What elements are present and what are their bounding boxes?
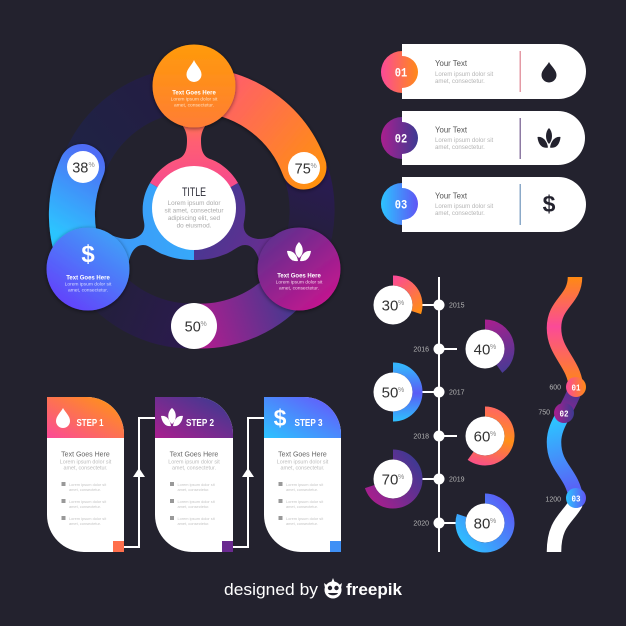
step 1 card: Lorem ipsum dolor sit (60, 460, 112, 466)
card 02: Lorem ipsum dolor sit (435, 137, 494, 144)
gauge: 70% (370, 454, 417, 504)
step 1 card: STEP 1 (76, 417, 104, 429)
badge: 38%: % (88, 162, 95, 169)
badge: 50%: 50 (185, 320, 201, 336)
badge: 75% (288, 152, 320, 184)
step 3 card: amet, consectetur. (286, 504, 318, 509)
card 03: 03 (395, 198, 407, 212)
center title circle: Lorem ipsum dolor (168, 200, 221, 207)
step 1 card: Lorem ipsum dolor sit (69, 482, 107, 487)
card 03: $ (543, 191, 556, 217)
center title circle (152, 166, 236, 250)
step 1 card: Text Goes Here (61, 452, 110, 458)
step 3 card: Lorem ipsum dolor sit (286, 499, 324, 504)
blue path segment (554, 413, 576, 498)
orange path segment (554, 277, 576, 387)
gauge: 40%: % (490, 344, 496, 351)
connector: right neck (194, 183, 284, 270)
node: right purple: Text Goes Here (277, 274, 321, 280)
year labels: 2016 (413, 346, 429, 354)
step 2 card: Lorem ipsum dolor sit (178, 516, 216, 521)
step 3 card: Lorem ipsum dolor sit (286, 482, 324, 487)
card 03: Your Text (435, 192, 468, 200)
step 2 card: amet, consectetur. (178, 504, 209, 509)
step 1 card (47, 397, 124, 552)
badge: 50% (171, 303, 217, 349)
value labels: 1200 (545, 496, 561, 504)
step 2 card: amet, consectetur. (178, 487, 209, 492)
gauge: 40% (466, 324, 509, 369)
node: left blue: amet, consectetur. (68, 288, 108, 294)
card 03 (381, 177, 586, 232)
node: left blue: Lorem ipsum dolor sit (65, 282, 112, 288)
connector: left neck (104, 183, 194, 270)
marker 02: 02 (560, 410, 568, 420)
step 2 card: Lorem ipsum dolor sit (178, 482, 216, 487)
gauge: 80% (460, 498, 509, 548)
step 1 card: amet, consectetur. (69, 504, 101, 509)
panel: step flow (47, 397, 341, 552)
step 2 card: STEP 2 (186, 417, 214, 429)
panel: winding path chart (538, 277, 586, 552)
node: left blue (46, 228, 130, 310)
year labels: 2018 (413, 434, 429, 440)
card 01: Your Text (435, 59, 468, 68)
marker 01: 01 (572, 384, 581, 394)
node: top orange (152, 44, 236, 128)
step 3 card: amet, consectetur. (286, 487, 318, 492)
step 1 card: amet, consectetur. (69, 487, 101, 492)
blue arc (72, 167, 82, 255)
badge: 38%: 38 (72, 160, 88, 176)
year labels: 2017 (449, 390, 465, 396)
gauge: 50%: 50 (382, 384, 398, 402)
badge: 75%: % (310, 163, 317, 170)
gauge: 60% (466, 411, 510, 461)
gauge: 80%: 80 (474, 516, 490, 532)
card 03: Lorem ipsum dolor sit (435, 203, 494, 210)
value labels: 600 (549, 384, 561, 392)
marker 03 (566, 488, 586, 508)
step 1 card: Lorem ipsum dolor sit (69, 499, 107, 504)
node: right purple (258, 228, 340, 310)
value labels (538, 384, 561, 504)
gauge: 80%: % (490, 518, 496, 525)
year labels (413, 302, 465, 528)
card 01: amet, consectetur. (435, 78, 485, 85)
designed by text: designed by (224, 581, 319, 599)
connector: top neck (150, 116, 238, 208)
timeline axis with connectors (420, 277, 457, 552)
gauge: 50%: % (398, 387, 404, 394)
marker 02 (554, 403, 574, 423)
card 02: Your Text (435, 126, 468, 134)
year labels: 2015 (449, 302, 465, 310)
center title circle: do eiusmod. (177, 222, 212, 230)
value labels: 750 (538, 410, 550, 416)
gauge: 40%: 40 (474, 342, 490, 358)
purple arc (194, 282, 292, 326)
step 3 card: STEP 3 (294, 417, 323, 429)
node: top orange: Lorem ipsum dolor sit (171, 96, 218, 102)
node: left blue: $ (81, 241, 95, 268)
step 2 card: Text Goes Here (170, 452, 218, 458)
gauge: 60%: % (490, 431, 496, 438)
marker 01 (566, 377, 586, 397)
node: left blue: Text Goes Here (66, 276, 110, 282)
card 01 (381, 44, 586, 99)
freepik wordmark: freepik (346, 580, 403, 599)
year labels: 2020 (413, 520, 429, 528)
node: right purple: amet, consectetur. (279, 286, 319, 292)
center title circle: TITLE (182, 187, 206, 199)
badge: 50%: % (200, 321, 207, 328)
card 01: 01 (395, 66, 407, 80)
badge: 75%: 75 (295, 162, 311, 178)
node: top orange: Text Goes Here (172, 90, 216, 96)
step 2 card (155, 397, 233, 552)
icon: mascot (324, 578, 342, 598)
gauge: 30%: 30 (382, 298, 398, 314)
step 1 card: Lorem ipsum dolor sit (69, 516, 107, 521)
gauge: 70%: % (398, 474, 404, 481)
card 03: amet, consectetur. (435, 210, 485, 217)
footer branding (224, 578, 403, 599)
step 3 card: $ (274, 405, 287, 431)
center title circle: sit amet, consectetur (165, 208, 224, 214)
gauge: 60%: 60 (474, 428, 490, 446)
center title circle: adipiscing elit, sed (168, 215, 221, 222)
card 02 (381, 111, 585, 165)
step 1 card: amet, consectetur. (63, 466, 108, 472)
dark ring track right (300, 167, 312, 262)
step 2 card: Lorem ipsum dolor sit (168, 460, 220, 466)
card 01: Lorem ipsum dolor sit (435, 71, 494, 78)
step 2 card: amet, consectetur. (178, 521, 209, 526)
badge: 38% (67, 151, 99, 183)
connector arrow 2 to 3 (233, 418, 264, 547)
panel: radial diagram (46, 44, 340, 349)
white path segment (554, 503, 576, 552)
orange arc (205, 90, 304, 167)
node: right purple: Lorem ipsum dolor sit (276, 280, 323, 286)
card 02: 02 (395, 132, 407, 146)
gauge: 30% (374, 280, 418, 324)
purple path segment (564, 387, 576, 413)
card 02: amet, consectetur. (435, 144, 485, 151)
connector arrow 1 to 2 (124, 418, 155, 547)
step 3 card: Text Goes Here (278, 452, 327, 458)
step 3 card (264, 397, 341, 552)
panel: numbered cards (381, 44, 586, 232)
step 2 card: Lorem ipsum dolor sit (178, 499, 216, 504)
step 2 card: amet, consectetur. (172, 466, 216, 472)
step 3 card: Lorem ipsum dolor sit (277, 460, 329, 466)
dark ring track bottom left (90, 268, 194, 326)
step 3 card: amet, consectetur. (280, 466, 325, 472)
year labels: 2019 (449, 476, 465, 484)
step 3 card: Lorem ipsum dolor sit (286, 516, 324, 521)
step 1 card: amet, consectetur. (69, 521, 101, 526)
gauge: 70%: 70 (382, 472, 398, 488)
panel: timeline (370, 277, 510, 552)
gauge: 30%: % (398, 300, 404, 307)
marker 03: 03 (572, 494, 580, 504)
step 3 card: amet, consectetur. (286, 521, 318, 526)
dark ring track upper left (83, 92, 170, 167)
node: top orange: amet, consectetur. (174, 102, 214, 108)
gauge: 50% (374, 368, 417, 416)
